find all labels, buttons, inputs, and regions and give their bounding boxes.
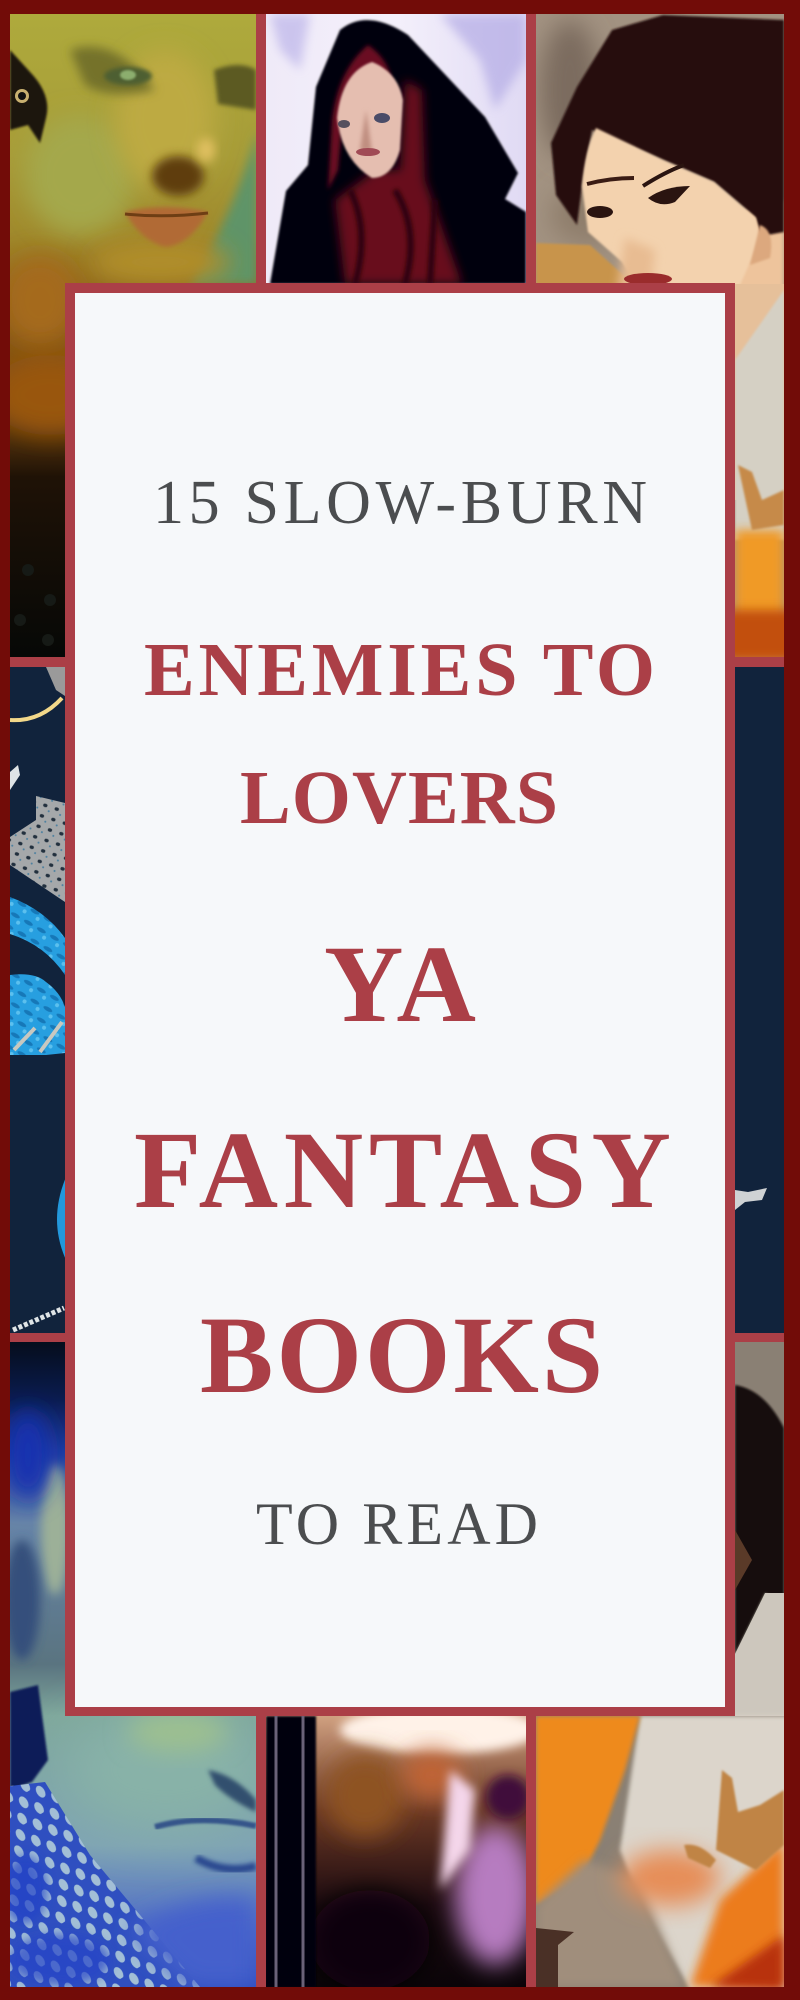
photo: hooded red-haired woman cover, top centre — [266, 14, 526, 284]
heading line: fantasy: FANTASY — [134, 1109, 671, 1231]
heading line: to read: TO READ — [256, 1491, 538, 1557]
heading line: books: BOOKS — [200, 1294, 603, 1416]
photo: navy cover strip, middle right — [735, 667, 784, 1333]
heading line: enemies to: ENEMIES TO — [144, 628, 655, 712]
heading line: YA: YA — [324, 923, 476, 1045]
title panel — [65, 283, 735, 1716]
photo: fire and purple cover, bottom centre — [266, 1706, 540, 1990]
photo: blue face cover, bottom left — [3, 1342, 265, 1987]
heading line: lovers: LOVERS — [240, 756, 558, 840]
photo: navy cover strip, middle left — [10, 667, 66, 1333]
heading line: 15 slow-burn: 15 SLOW-BURN — [153, 469, 647, 537]
photo: woman with fire cover, bottom right — [536, 1342, 790, 1990]
photo: olive face cover, top left — [0, 14, 258, 657]
photo: woman with dark hair and fire cover, top right — [536, 14, 795, 660]
